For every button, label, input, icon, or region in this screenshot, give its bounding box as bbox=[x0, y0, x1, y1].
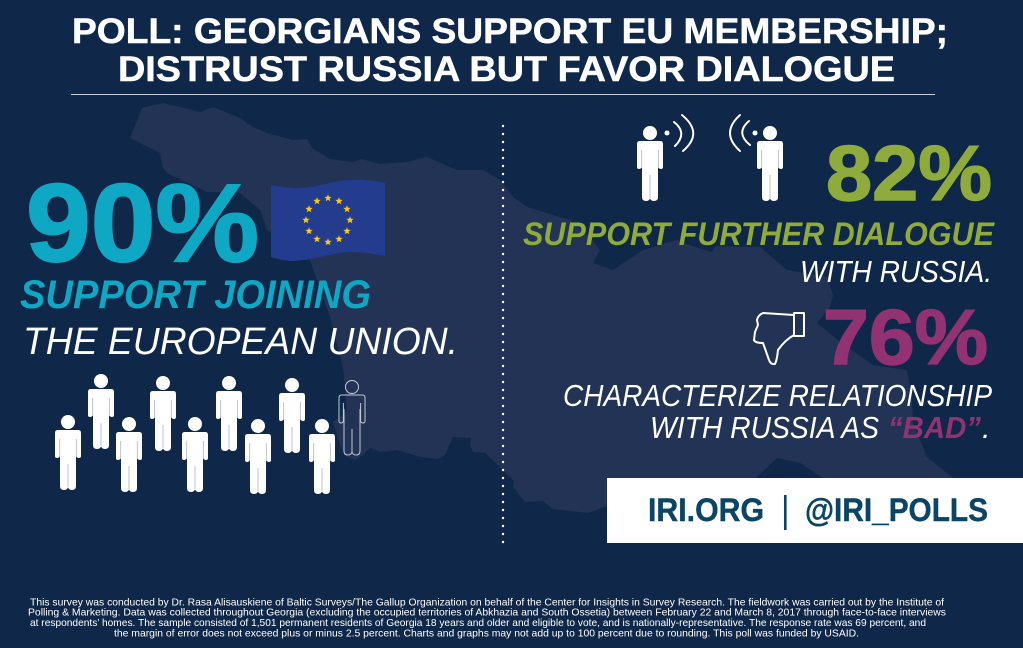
icon: ten people, nine filled bbox=[55, 374, 365, 494]
statistic: 76%: 76% bbox=[823, 293, 988, 381]
title: DISTRUST RUSSIA BUT FAVOR DIALOGUE bbox=[118, 50, 895, 89]
footnote: Polling & Marketing. Data was collected throughout Georgia (excluding the occupied territories of Abkhazia and South Ossetia) between February 22 and March 8, 2017 through face-to-face interviews bbox=[28, 608, 946, 618]
footnote: at respondents’ homes. The sample consisted of 1,501 permanent residents of Georgia 18 years and older and eligible to vote, and is nationally-representative. The response rate was 69 percent, and bbox=[30, 618, 926, 629]
callout: website and handle: @IRI_POLLS bbox=[805, 492, 988, 528]
text: with Russia: WITH RUSSIA. bbox=[800, 254, 992, 289]
heading: support further dialogue: SUPPORT FURTHER DIALOGUE bbox=[523, 216, 996, 252]
icon: two people in dialogue bbox=[637, 115, 783, 201]
panel: dialogue with Russia bbox=[523, 115, 996, 289]
icon: EU flag bbox=[271, 180, 385, 261]
statistic: 82%: 82% bbox=[826, 129, 992, 217]
divider: dotted line bbox=[502, 126, 504, 543]
callout: website and handle bbox=[607, 478, 1023, 543]
text: with Russia as bad: . bbox=[982, 410, 991, 445]
panel: EU support bbox=[20, 162, 458, 494]
footnote: This survey was conducted by Dr. Rasa Alisauskiene of Baltic Surveys/The Gallup Organization on behalf of the Center for Insights in Survey Research. The fieldwork was carried out by the Institute of bbox=[30, 598, 944, 608]
title bbox=[72, 12, 948, 89]
footnote bbox=[28, 598, 946, 640]
icon: thumbs down bbox=[754, 313, 804, 364]
callout: website and handle: IRI.ORG bbox=[648, 492, 764, 528]
text: the European Union: THE EUROPEAN UNION. bbox=[23, 321, 458, 363]
heading: support joining: SUPPORT JOINING bbox=[20, 273, 371, 317]
title: POLL: GEORGIANS SUPPORT EU MEMBERSHIP; bbox=[72, 12, 948, 51]
map of Georgia silhouette bbox=[130, 103, 953, 513]
text: with Russia as bad: WITH RUSSIA AS bbox=[650, 410, 879, 445]
footnote: the margin of error does not exceed plus or minus 2.5 percent. Charts and graphs may not add up to 100 percent due to rounding. This poll was funded by USAID. bbox=[114, 628, 859, 640]
statistic: 90%: 90% bbox=[26, 162, 259, 285]
text: with Russia as bad: “BAD” bbox=[888, 410, 981, 445]
panel: relationship with Russia bbox=[563, 293, 992, 445]
